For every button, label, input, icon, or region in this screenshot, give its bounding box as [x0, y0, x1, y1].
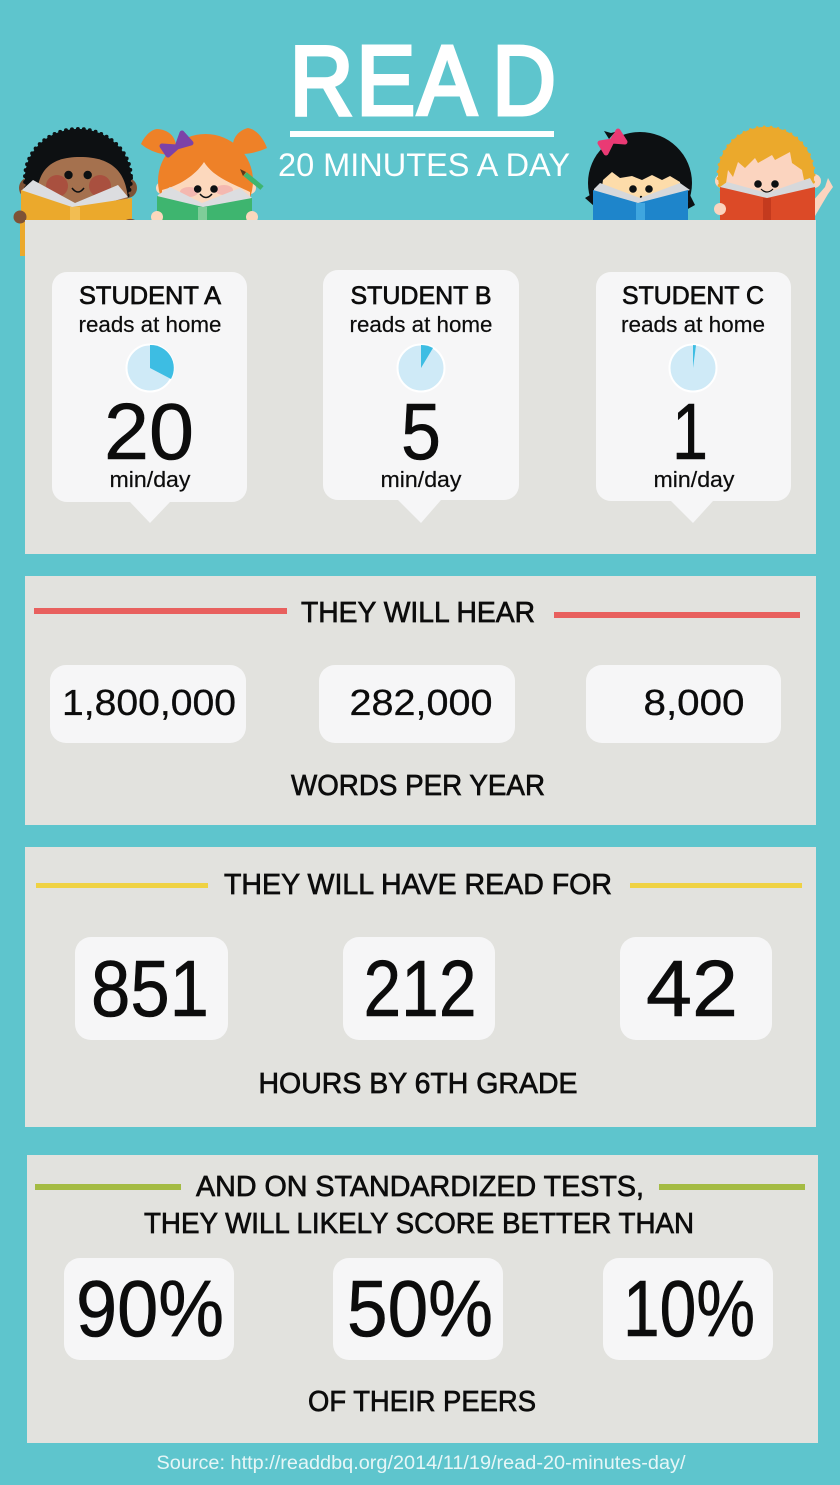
illustration: boy with yellow book	[14, 129, 137, 256]
pie: 1 minute	[670, 344, 716, 392]
card: student A: 20	[104, 387, 194, 476]
caption: of their peers: OF THEIR PEERS	[308, 1386, 536, 1418]
illustration: girl with blue book	[585, 131, 695, 234]
title	[278, 26, 570, 183]
pie: 20 minutes	[126, 344, 174, 392]
panel: students	[25, 220, 816, 554]
value: 10%: 10%	[623, 1264, 755, 1353]
heading: standardized tests	[144, 1171, 694, 1240]
heading: standardized tests: THEY WILL LIKELY SCORE BETTER THAN	[144, 1208, 694, 1240]
card: student C: STUDENT C	[622, 282, 764, 310]
caption: hours by 6th grade: HOURS BY 6TH GRADE	[258, 1068, 578, 1100]
card: student A: STUDENT A	[79, 282, 221, 310]
value: 282,000: 282,000	[350, 682, 492, 723]
card: student B: 5	[401, 387, 441, 476]
card: student B: reads at home	[350, 312, 492, 337]
value: 8,000: 8,000	[644, 682, 744, 723]
illustration: girl with green book	[141, 128, 267, 228]
card: student C	[596, 272, 791, 523]
card: student A	[52, 272, 247, 523]
heading: they will hear: THEY WILL HEAR	[301, 597, 535, 629]
value: 42	[620, 937, 772, 1040]
heading: standardized tests: AND ON STANDARDIZED TESTS,	[196, 1171, 644, 1203]
value: 8,000	[586, 665, 781, 743]
panel: they will hear	[25, 576, 816, 825]
illustration: boy with red book	[714, 127, 833, 223]
card: student B	[323, 270, 519, 523]
value: 50%: 50%	[347, 1264, 493, 1353]
title: READ	[290, 26, 556, 136]
card: student B: STUDENT B	[350, 282, 492, 310]
value: 212: 212	[364, 944, 476, 1033]
title: 20 MINUTES A DAY	[278, 147, 570, 183]
value: 851: 851	[91, 944, 209, 1033]
panel: they will have read for	[25, 847, 816, 1127]
pie: 5 minutes	[398, 344, 444, 392]
heading: they will have read for: THEY WILL HAVE READ FOR	[224, 869, 612, 901]
value: 90%: 90%	[76, 1264, 224, 1353]
card: student A: reads at home	[78, 312, 222, 337]
card: student B: min/day	[380, 467, 462, 492]
value: 1,800,000: 1,800,000	[62, 682, 236, 723]
panel: standardized tests	[27, 1155, 818, 1443]
value: 42: 42	[646, 944, 738, 1033]
card: student C: 1	[672, 387, 708, 476]
value: 1,800,000	[50, 665, 246, 743]
value: 282,000	[319, 665, 515, 743]
source line: Source: http://readdbq.org/2014/11/19/read-20-minutes-day/	[156, 1453, 686, 1474]
card: student A: min/day	[110, 467, 190, 492]
caption: words per year: WORDS PER YEAR	[291, 770, 545, 802]
card: student C: min/day	[654, 467, 734, 492]
card: student C: reads at home	[621, 312, 765, 337]
